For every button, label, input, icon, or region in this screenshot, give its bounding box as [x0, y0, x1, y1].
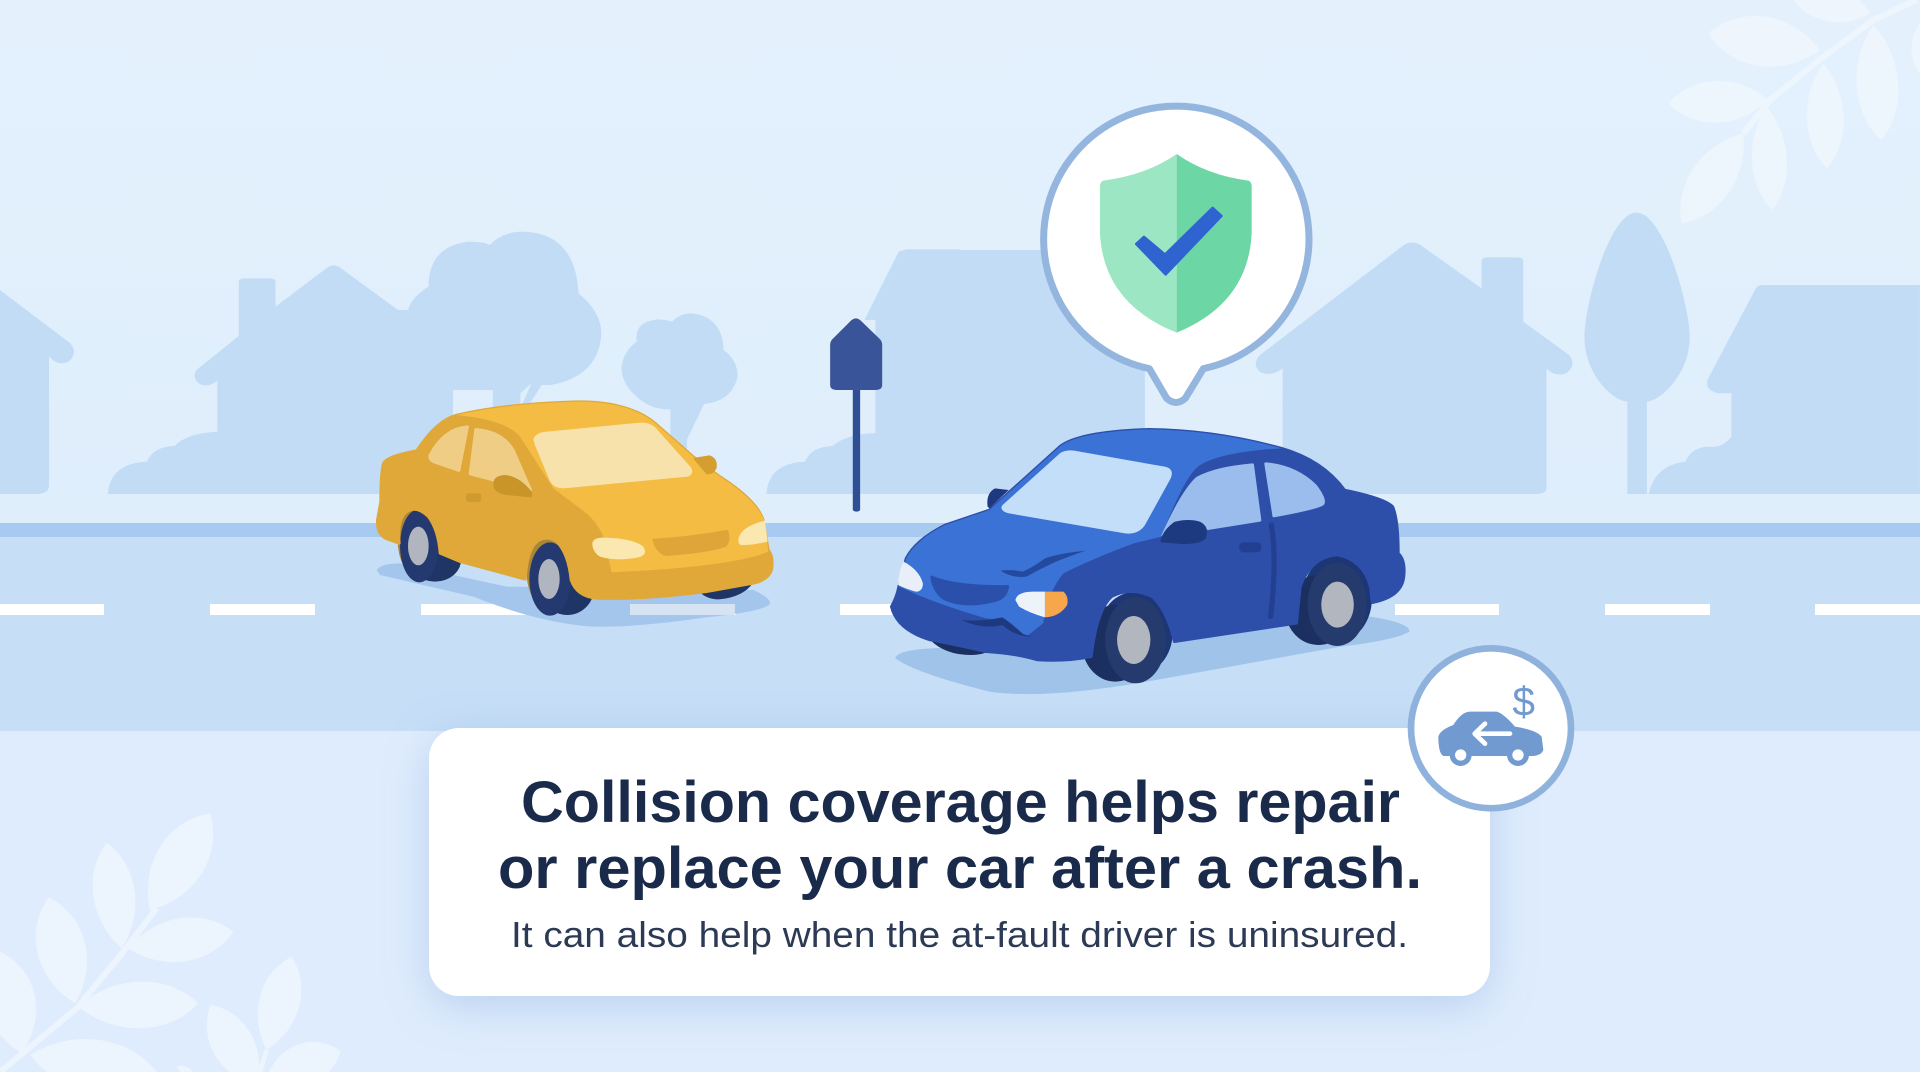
rear side window [430, 427, 468, 471]
card background [429, 728, 1490, 996]
near mirror [1162, 521, 1205, 543]
front side window [470, 429, 531, 490]
wheel arch shading [1099, 555, 1372, 675]
road [0, 537, 1920, 731]
door handle [466, 493, 481, 502]
blue car [891, 429, 1409, 694]
windshield [535, 424, 691, 487]
far tyre [698, 583, 753, 599]
heading: Collision coverage helps repair [521, 770, 1400, 835]
far tyre [930, 640, 988, 655]
check mark [1136, 208, 1221, 274]
faded dash over shadow [630, 604, 735, 615]
car shadow [895, 617, 1409, 694]
rear side window [1266, 464, 1324, 516]
heading: or replace your car after a crash. [498, 836, 1422, 901]
leaf decoration bottom left [0, 800, 347, 1072]
sign post [853, 387, 860, 512]
car body [377, 402, 772, 599]
slim tree [1584, 213, 1690, 494]
front wheel [1082, 597, 1166, 683]
house far right [1649, 285, 1920, 494]
house behind sign [766, 249, 960, 494]
grille [932, 577, 1008, 604]
lane dashes [0, 604, 1920, 615]
road sign [830, 318, 882, 512]
left headlight [592, 538, 645, 559]
front headlight [1015, 592, 1068, 617]
icon: shield [1100, 154, 1252, 333]
sign plate [830, 318, 882, 390]
right headlight [738, 521, 768, 545]
lower ground [0, 731, 1920, 1072]
house with chimney right [1256, 242, 1572, 494]
roof and hood [899, 429, 1282, 637]
far mirror [987, 488, 1009, 508]
yellow car [377, 402, 772, 627]
bubble outline [1044, 106, 1309, 402]
subheading: It can also help when the at-fault driver is uninsured. [511, 914, 1408, 955]
car wheels [1450, 744, 1529, 766]
shield speech bubble [1044, 106, 1309, 402]
heading [498, 770, 1422, 901]
door line [1271, 525, 1274, 617]
house with chimney [108, 265, 407, 494]
icon: car replacement cost [1411, 648, 1571, 808]
sidewalk [0, 494, 1920, 523]
hood crease [1001, 551, 1086, 577]
rear wheel [1285, 563, 1367, 646]
leaf decoration top right [1664, 0, 1920, 235]
car shadow [377, 563, 770, 627]
windshield [1003, 452, 1170, 532]
neighbourhood silhouettes right [959, 213, 1920, 494]
rear tyre [400, 509, 461, 582]
neighbourhood silhouettes left [0, 232, 960, 494]
car silhouette [1438, 712, 1543, 756]
background sky [0, 0, 1920, 495]
car body [891, 429, 1404, 660]
front tyre [529, 542, 594, 616]
small tree [621, 313, 738, 463]
house far left [0, 290, 74, 494]
grille [654, 531, 728, 555]
caption card [429, 728, 1490, 996]
wheel arch shading [398, 505, 572, 610]
road edge strip [0, 523, 1920, 537]
roof and hood [457, 402, 768, 572]
arrow [1475, 724, 1510, 744]
large tree [407, 232, 601, 410]
icon circle [1411, 648, 1571, 808]
bumper crumple [962, 617, 1032, 637]
far headlight [898, 562, 923, 592]
door handle [1239, 542, 1261, 552]
house behind bubble [959, 250, 1145, 494]
far mirror [695, 457, 716, 473]
near mirror [495, 476, 531, 496]
dollar sign: $ [1512, 678, 1535, 724]
front side window [1163, 465, 1260, 535]
